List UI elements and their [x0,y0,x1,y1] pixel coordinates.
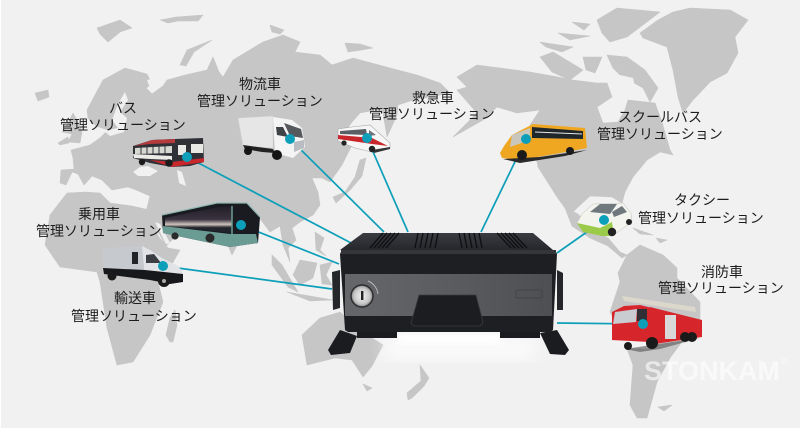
label: taxi: 管理ソリューション [638,210,764,226]
vents [370,233,527,248]
central DVR device [328,233,569,355]
connector dots [158,133,648,329]
label: ambulance: 管理ソリューション [369,106,495,122]
grey band [345,274,552,316]
label: taxi [638,192,764,226]
armored van [103,246,183,287]
label: passenger vehicle [36,206,162,239]
label: logistics truck: 管理ソリューション [197,93,323,109]
label: ambulance: 救急車 [412,90,454,106]
label: transport vehicle [71,290,197,324]
city bus [133,138,204,167]
handle [411,295,483,326]
label plate [516,290,542,298]
coach bus [162,203,260,247]
device shadow [385,333,535,360]
label: fire truck [658,264,784,296]
fire truck [611,296,702,352]
delivery truck [238,116,305,160]
brand watermark: STONKAM [644,356,780,386]
label: bus: バス [109,100,137,116]
label: fire truck: 管理ソリューション [658,280,784,296]
label: logistics truck [197,76,323,109]
label: school bus [597,109,723,142]
mounting brackets [328,330,569,355]
taxi [577,203,632,236]
label: bus: 管理ソリューション [60,117,186,133]
label: transport vehicle: 管理ソリューション [71,308,197,324]
front panel [340,250,557,332]
label: passenger vehicle: 管理ソリューション [36,223,162,239]
label: school bus: 管理ソリューション [597,126,723,142]
label: fire truck: 消防車 [701,264,743,280]
keyhole [361,291,363,300]
label: transport vehicle: 輸送車 [114,290,156,306]
label: school bus: スクールバス [618,109,702,125]
label: logistics truck: 物流車 [239,76,281,92]
ambulance [338,125,390,153]
connector lines [163,138,643,324]
label: passenger vehicle: 乗用車 [78,206,120,222]
rim strip [341,250,556,254]
brand watermark: ® [781,357,789,368]
school bus [500,124,587,163]
label: ambulance [369,90,495,122]
top cover [340,233,553,250]
side clips [332,270,563,310]
lock arc [368,281,378,294]
lock [351,285,373,307]
label: taxi: タクシー [674,192,730,208]
label: bus [60,100,186,133]
